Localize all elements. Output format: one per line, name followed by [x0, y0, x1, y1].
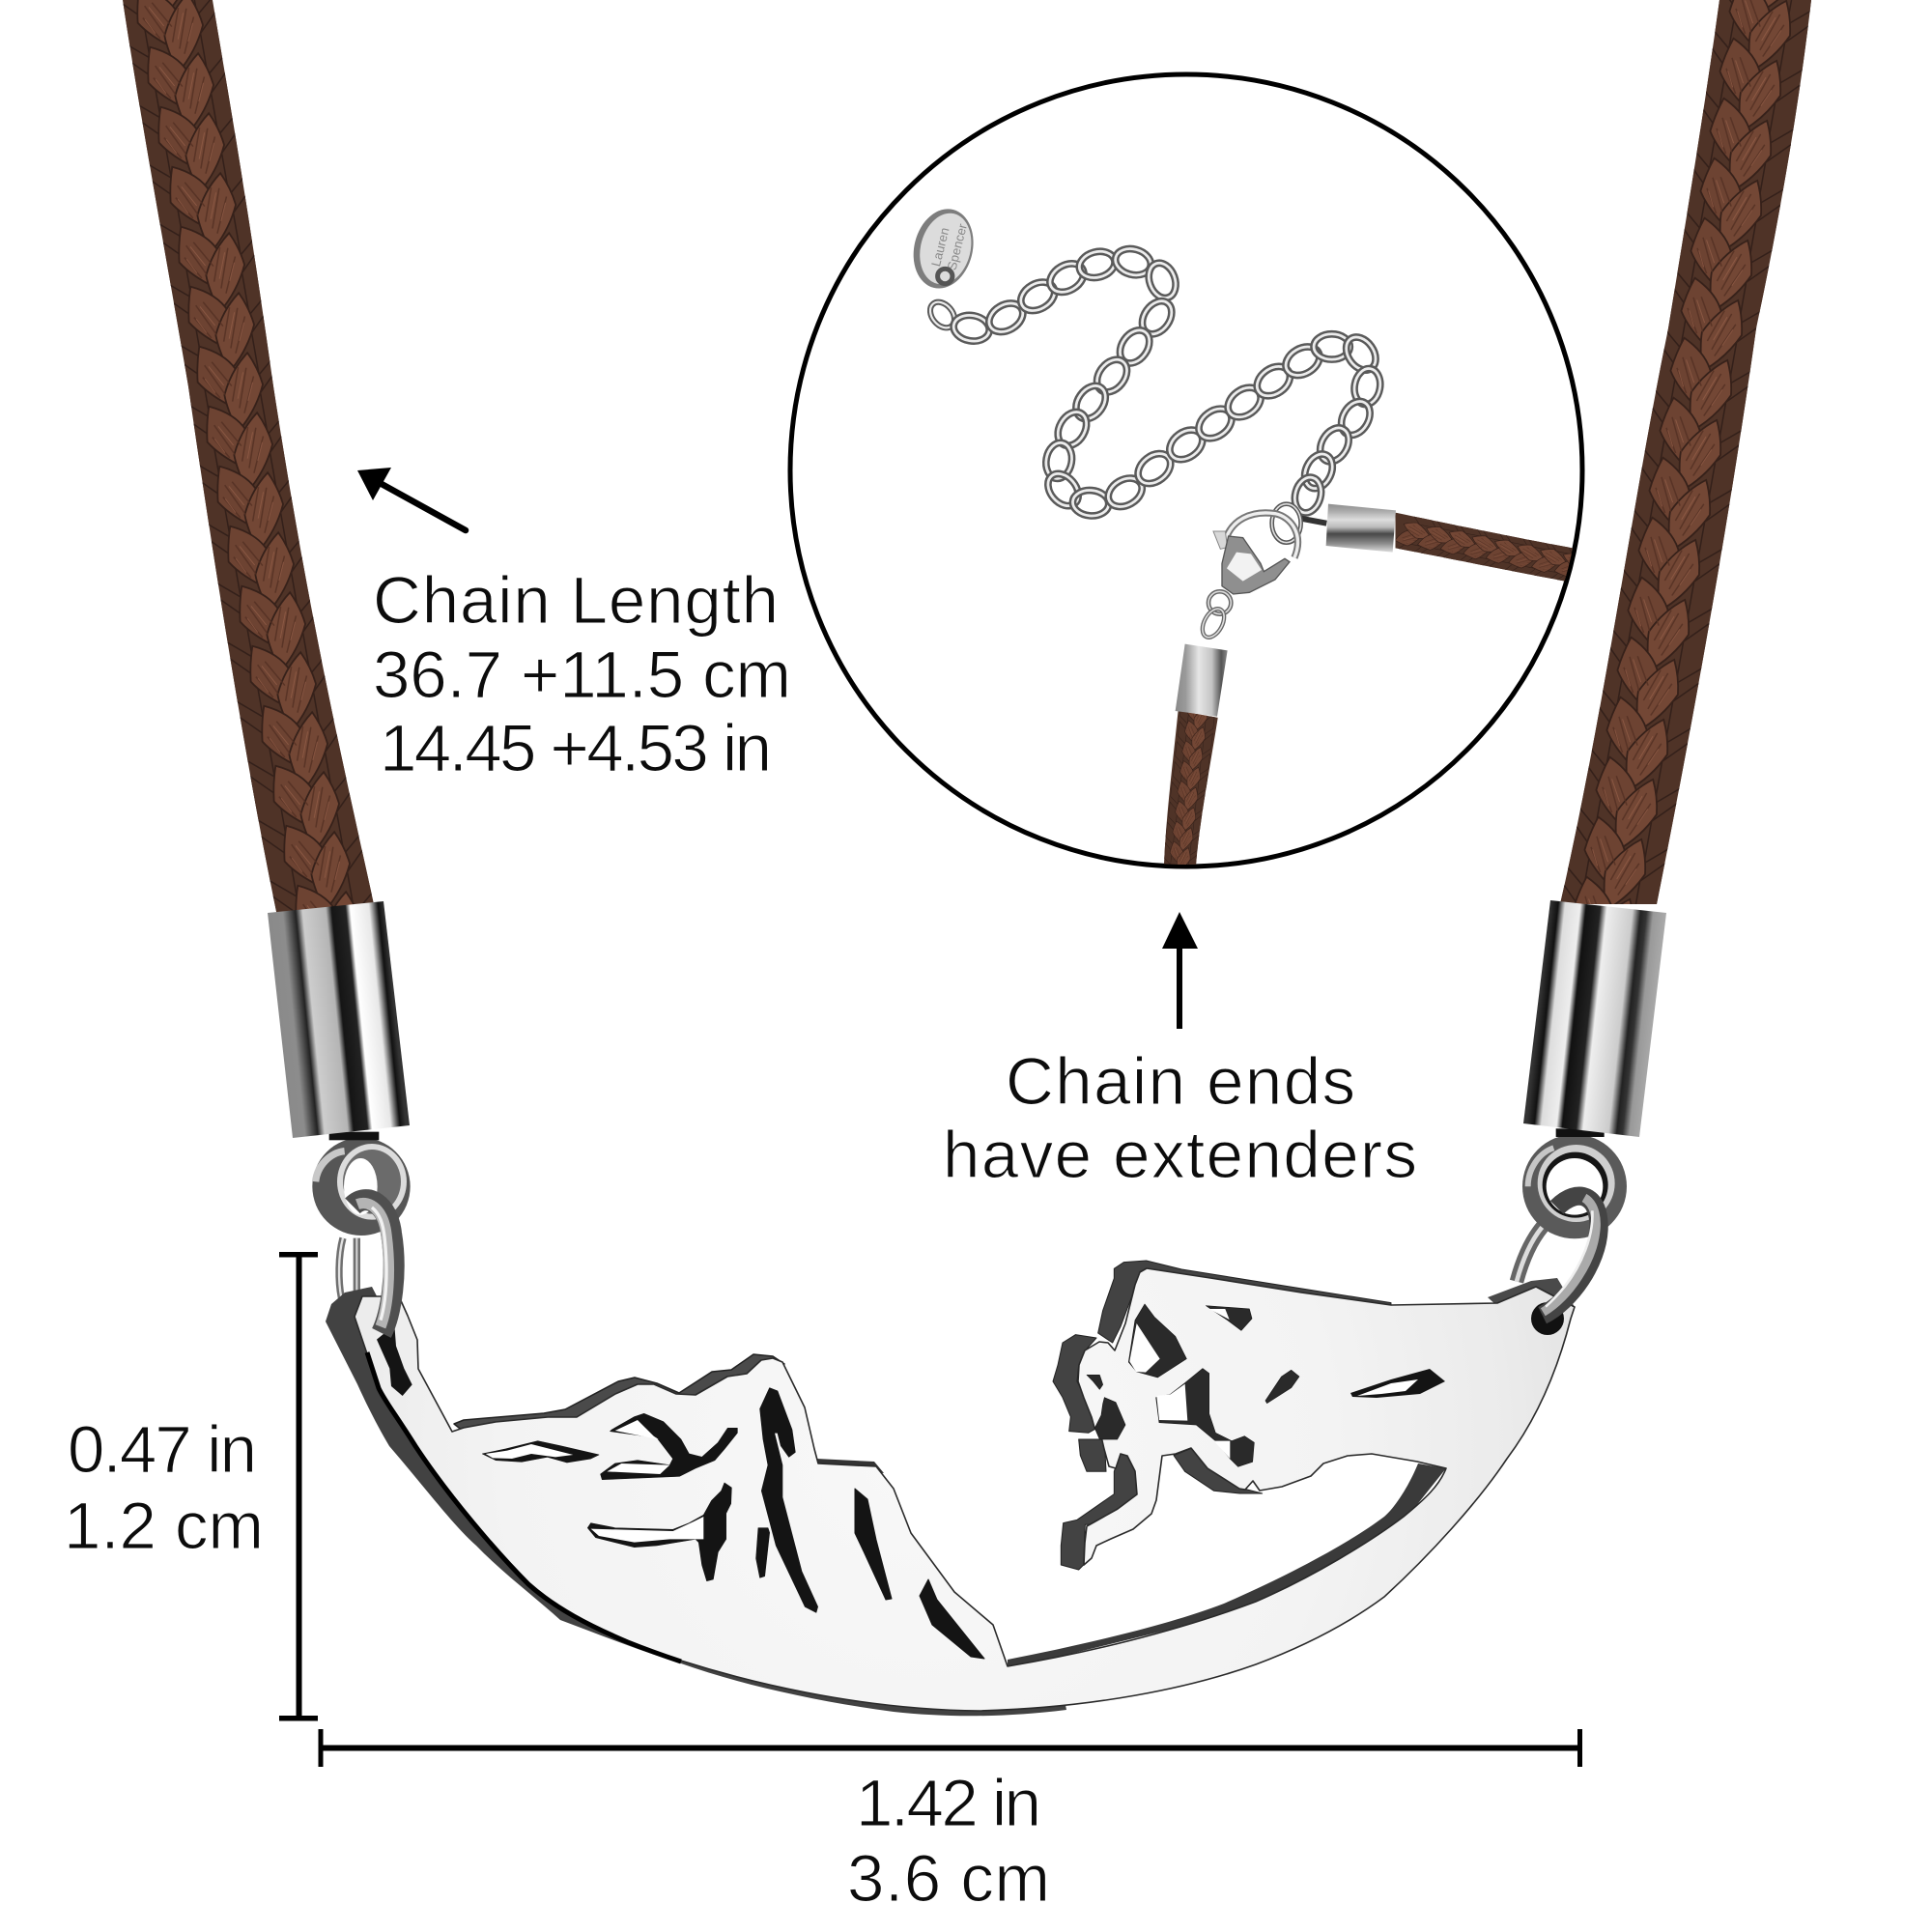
- pendant dark back edge: [326, 1287, 1066, 1716]
- text: pendant height: 0.47 in: [68, 1412, 257, 1487]
- text: chain ends have extenders: Chain ends: [1006, 1044, 1355, 1119]
- silver face: [355, 1268, 1575, 1711]
- shelf line: [816, 1459, 884, 1473]
- text: chain ends have extenders: have extenders: [943, 1118, 1417, 1192]
- lobster clasp, rings and small cylinders: [1176, 504, 1396, 717]
- text: chain length: 14.45 +4.53 in: [380, 711, 772, 785]
- left tip slit: [377, 1325, 412, 1396]
- right rock holes: [1350, 1369, 1445, 1398]
- text: chain length: Chain Length: [373, 563, 779, 638]
- gap dark inner band: [1008, 1463, 1446, 1669]
- horizontal dimension line: [319, 1729, 1582, 1767]
- arrow: chain length: [357, 468, 466, 530]
- right metal ring and back link: [1517, 1128, 1627, 1282]
- horizontal cord: [1395, 512, 1573, 582]
- mountain snow and crack holes: [482, 1388, 818, 1612]
- lower-left black edge line: [367, 1352, 681, 1662]
- lower mountain cracks: [855, 1489, 984, 1659]
- oval brand tag: Lauren: [928, 226, 952, 268]
- climber holes: [1087, 1304, 1299, 1466]
- left metal cylinder connector: [268, 901, 410, 1138]
- top right eyelet: [1531, 1302, 1564, 1335]
- left front jump ring: [353, 1200, 394, 1333]
- arrow: chain ends: [1162, 912, 1198, 1029]
- text: pendant height: [64, 1412, 264, 1563]
- right metal cylinder connector: [1523, 900, 1666, 1137]
- detail circle contents: [905, 203, 1597, 876]
- text: pendant width: [847, 1766, 1050, 1916]
- text: chain ends have extenders: [943, 1044, 1417, 1192]
- vertical cord: [1164, 711, 1218, 865]
- text: pendant width: 1.42 in: [856, 1766, 1041, 1840]
- top right bevel: [1488, 1278, 1575, 1307]
- right front jump ring: [1543, 1196, 1599, 1316]
- right braided cord: [1561, 0, 1811, 904]
- text: pendant width: 3.6 cm: [847, 1841, 1050, 1916]
- text: chain length: [373, 563, 791, 785]
- left braided cord: [123, 0, 373, 912]
- vertical dimension line: [279, 1252, 318, 1721]
- climber dark bevels: [1053, 1261, 1391, 1570]
- left metal ring and back link: [312, 1132, 411, 1297]
- oval brand tag: Spencer: [945, 221, 970, 271]
- oval brand tag: [914, 209, 974, 288]
- text: pendant height: 1.2 cm: [64, 1489, 264, 1563]
- pendant: mountain and climber cut-out: [326, 1261, 1575, 1716]
- chain links: [925, 245, 1383, 517]
- mountain top bevel: [454, 1354, 784, 1432]
- detail circle outline: [790, 74, 1582, 867]
- text: chain length: 36.7 +11.5 cm: [373, 638, 791, 712]
